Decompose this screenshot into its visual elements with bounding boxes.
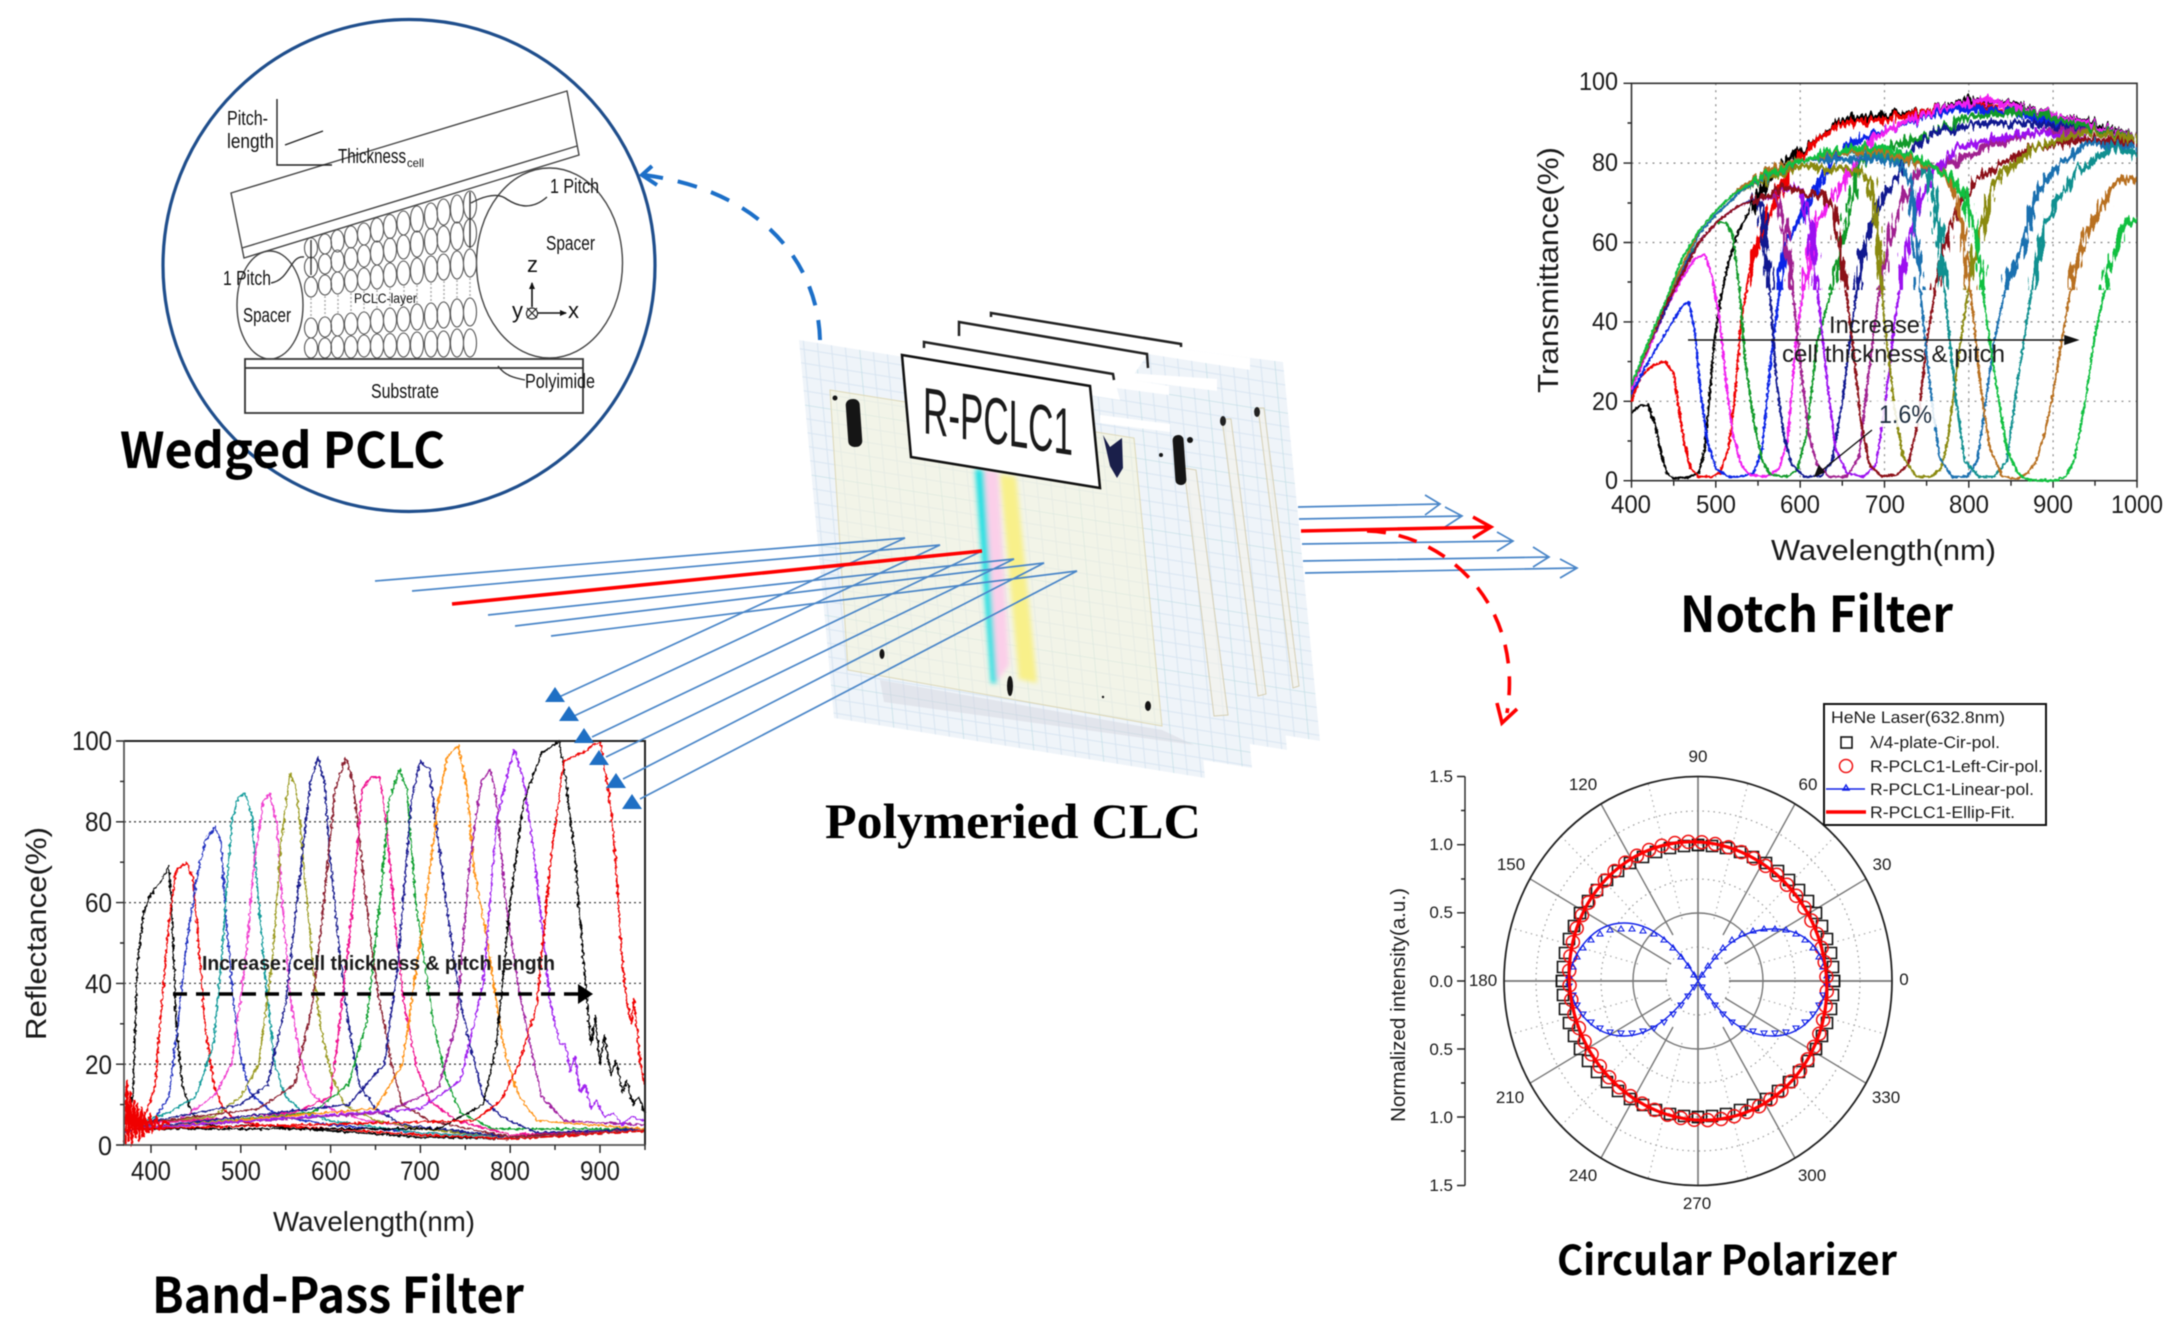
band-pass x axis labels: 900 bbox=[580, 1156, 620, 1186]
legend: circle marker row: R-PCLC1-Left-Cir-pol. bbox=[1870, 757, 2043, 776]
polar radial labels: 0.5 bbox=[1429, 903, 1453, 922]
polar radial labels: 1.0 bbox=[1429, 835, 1453, 854]
notch annotation text: Increase bbox=[1829, 312, 1920, 339]
notch plot frame and grid bbox=[1624, 83, 2137, 488]
1.6% callout bbox=[1815, 401, 1936, 476]
spacers bbox=[237, 168, 622, 359]
band-pass x axis title: Wavelength(nm) bbox=[273, 1206, 475, 1237]
notch x axis labels: 900 bbox=[2033, 491, 2073, 519]
heading: Polymeried CLC: Polymeried CLC bbox=[825, 793, 1201, 849]
polar angle labels bbox=[1469, 747, 1909, 1213]
polar angle labels: 0 bbox=[1899, 970, 1909, 989]
back film 2 bbox=[881, 378, 1252, 768]
series: linear polarized lobes bbox=[1566, 923, 1830, 1036]
wedged diagram labels bbox=[223, 108, 599, 403]
polar grid rings bbox=[1536, 811, 1860, 1151]
polar radial labels bbox=[1429, 767, 1453, 1195]
band-pass tick labels: 40 bbox=[85, 969, 112, 999]
notch x axis labels: 400 bbox=[1611, 491, 1651, 519]
wedged diagram labels: 1 Pitch bbox=[223, 268, 271, 290]
wedged diagram labels: Polyimide bbox=[525, 371, 595, 393]
notch annotation arrow bbox=[1688, 336, 2077, 344]
cream sample cell bbox=[830, 390, 1162, 726]
notch annotation text bbox=[1782, 312, 2005, 368]
transmitted rays bbox=[1298, 495, 1577, 578]
band-pass annotation text: Increase: cell thickness & pitch length bbox=[202, 953, 555, 975]
polar radial labels: 0.0 bbox=[1429, 972, 1453, 991]
notch tick labels bbox=[1579, 68, 1618, 495]
polar angle labels: 120 bbox=[1569, 775, 1597, 794]
legend: HeNe Laser(632.8nm) bbox=[1831, 708, 2005, 727]
rear label white backing bbox=[924, 342, 1120, 400]
band-pass tick labels: 20 bbox=[85, 1050, 112, 1080]
wedged diagram labels: cell bbox=[407, 156, 424, 170]
polar angle labels: 270 bbox=[1683, 1194, 1711, 1213]
wedged diagram labels: PCLC-layer bbox=[354, 290, 417, 306]
polar angle labels: 90 bbox=[1689, 747, 1707, 766]
substrate bbox=[245, 359, 583, 413]
wedged schematic bbox=[223, 91, 622, 413]
band-pass tick labels: 80 bbox=[85, 807, 112, 837]
polar plot body bbox=[1504, 776, 1892, 1186]
notch x axis labels: 500 bbox=[1696, 491, 1736, 519]
polar half-intensity ring bbox=[1633, 913, 1763, 1049]
heading: Band-Pass Filter: Band-Pass Filter bbox=[152, 1257, 525, 1328]
polar y axis title: Normalized intensity(a.u.) bbox=[1388, 888, 1410, 1122]
pitch vs thickness inset axes bbox=[277, 99, 332, 165]
legend: fit row: R-PCLC1-Ellip-Fit. bbox=[1870, 803, 2015, 822]
1.6% callout: 1.6% bbox=[1879, 401, 1932, 429]
reflected colour bands bbox=[975, 469, 1037, 683]
polar radial axis bbox=[1457, 776, 1465, 1186]
notch x axis labels: 1000 bbox=[2111, 491, 2163, 519]
blue transmitted rays bbox=[1298, 495, 1577, 578]
wedged diagram labels: Pitch- bbox=[227, 108, 268, 130]
chart: band-pass filter reflectance bbox=[21, 726, 645, 1237]
label: R-PCLC1 bbox=[902, 355, 1100, 488]
polar angle labels: 180 bbox=[1469, 971, 1497, 990]
polar radial labels: 0.5 bbox=[1429, 1040, 1453, 1059]
polar angle labels: 240 bbox=[1569, 1166, 1597, 1185]
red transmitted ray bbox=[1301, 517, 1491, 538]
notch x axis labels: 700 bbox=[1865, 491, 1905, 519]
z-x axes bbox=[532, 283, 566, 313]
band-pass tick labels: 0 bbox=[98, 1131, 112, 1161]
heading: Wedged PCLC: Wedged PCLC bbox=[120, 412, 445, 483]
polar outer ring bbox=[1504, 776, 1892, 1186]
polar angle labels: 30 bbox=[1873, 855, 1891, 874]
top glass plate bbox=[231, 91, 579, 258]
wedged diagram labels: Spacer bbox=[546, 233, 595, 255]
polar spokes bbox=[1504, 776, 1892, 1186]
notch spectral curves bbox=[1632, 100, 2137, 481]
wedged diagram labels: 1 Pitch bbox=[550, 176, 599, 198]
band-pass tick labels: 100 bbox=[72, 726, 112, 756]
notch tick labels: 0 bbox=[1605, 467, 1618, 495]
heading: Circular Polarizer: Circular Polarizer bbox=[1557, 1227, 1897, 1287]
dashed blue arrow to wedged diagram bbox=[642, 166, 820, 340]
dotted helix links bbox=[311, 278, 470, 318]
notch tick labels: 40 bbox=[1592, 308, 1618, 336]
polar radial labels: 1.5 bbox=[1429, 1176, 1453, 1195]
front film bbox=[799, 340, 1205, 778]
circle outline bbox=[163, 20, 655, 512]
polar radial labels: 1.5 bbox=[1429, 767, 1453, 786]
chart: notch filter transmittance bbox=[1533, 68, 2163, 567]
sample tapes and dots bbox=[832, 396, 1193, 711]
notch curves: low noise region bbox=[1630, 180, 2107, 484]
legend: linear row: R-PCLC1-Linear-pol. bbox=[1870, 780, 2034, 799]
PCLC layer helices bbox=[304, 191, 476, 358]
leader lines and pitch arrows bbox=[271, 192, 547, 380]
band-pass plot frame bbox=[116, 741, 645, 1153]
wedged diagram labels: Substrate bbox=[371, 381, 439, 403]
band-pass x axis labels: 700 bbox=[400, 1156, 440, 1186]
incoming and reflected rays bbox=[375, 538, 1077, 809]
band-pass x axis labels: 800 bbox=[490, 1156, 530, 1186]
notch tick labels: 20 bbox=[1592, 388, 1618, 416]
panel: polymerized CLC film stack bbox=[799, 313, 1320, 778]
sample shadow bbox=[880, 680, 1194, 745]
wedged diagram labels: x bbox=[568, 298, 579, 323]
band-pass x axis labels: 500 bbox=[221, 1156, 261, 1186]
band-pass dashed arrow bbox=[173, 984, 593, 1004]
band-pass x axis labels: 600 bbox=[311, 1156, 351, 1186]
legend: square marker row: λ/4-plate-Cir-pol. bbox=[1870, 733, 2000, 752]
notch annotation text: cell thickness & pitch bbox=[1782, 341, 2005, 368]
band-pass x axis labels: 400 bbox=[131, 1156, 171, 1186]
polar angle labels: 300 bbox=[1798, 1166, 1826, 1185]
band-pass spectral curves bbox=[124, 741, 645, 1145]
band-pass tick labels bbox=[72, 726, 112, 1161]
wedged diagram labels: z bbox=[527, 252, 538, 277]
band-pass tick labels: 60 bbox=[85, 888, 112, 918]
wedged diagram labels: length bbox=[227, 131, 274, 153]
notch x axis title: Wavelength(nm) bbox=[1771, 535, 1996, 567]
polar angle labels: 60 bbox=[1799, 775, 1817, 794]
label: R-PCLC1: R-PCLC1 bbox=[923, 374, 1073, 470]
notch tick labels: 80 bbox=[1592, 149, 1618, 177]
band-pass y axis title: Reflectance(%) bbox=[21, 827, 53, 1040]
notch tick labels: 100 bbox=[1579, 68, 1618, 96]
wedged diagram labels: Thickness bbox=[338, 146, 406, 168]
series: left circular polarized circles bbox=[1563, 835, 1833, 1127]
blue reflected rays bbox=[375, 538, 1077, 799]
band-pass grid bbox=[124, 822, 645, 1064]
notch y axis title: Transmittance(%) bbox=[1533, 147, 1565, 393]
legend bbox=[1824, 704, 2046, 825]
wedged diagram labels: Spacer bbox=[243, 305, 291, 327]
chart: circular polarizer polar plot bbox=[1388, 704, 2046, 1213]
z-x arrowheads bbox=[529, 282, 567, 316]
notch x axis labels: 800 bbox=[1949, 491, 1989, 519]
polar angle labels: 330 bbox=[1872, 1088, 1900, 1107]
polar radial labels: 1.0 bbox=[1429, 1108, 1453, 1127]
rear label bracket bbox=[924, 342, 1114, 380]
series: quarter-wave plate squares bbox=[1556, 840, 1840, 1122]
notch x axis labels: 600 bbox=[1780, 491, 1820, 519]
blue arrowheads bbox=[545, 687, 642, 809]
notch tick labels: 60 bbox=[1592, 229, 1618, 257]
cross-out y axis symbol bbox=[527, 308, 538, 319]
panel: wedged PCLC diagram bbox=[120, 20, 655, 512]
notch x axis labels bbox=[1611, 491, 2163, 519]
white rear label strips bbox=[1085, 372, 1170, 432]
red incident ray bbox=[452, 551, 982, 604]
heading: Notch Filter: Notch Filter bbox=[1680, 576, 1954, 647]
series: elliptical fit bbox=[1538, 813, 1858, 1149]
dashed red arrow to circular polarizer bbox=[1367, 531, 1517, 723]
back film 4 bbox=[949, 313, 1320, 741]
back film 3 bbox=[916, 322, 1287, 750]
band-pass x axis labels bbox=[131, 1156, 620, 1186]
wedged diagram labels: y bbox=[512, 298, 523, 323]
notch curves: high noise region bbox=[1749, 92, 2138, 291]
polar angle labels: 150 bbox=[1497, 855, 1525, 874]
polar angle labels: 210 bbox=[1496, 1088, 1524, 1107]
